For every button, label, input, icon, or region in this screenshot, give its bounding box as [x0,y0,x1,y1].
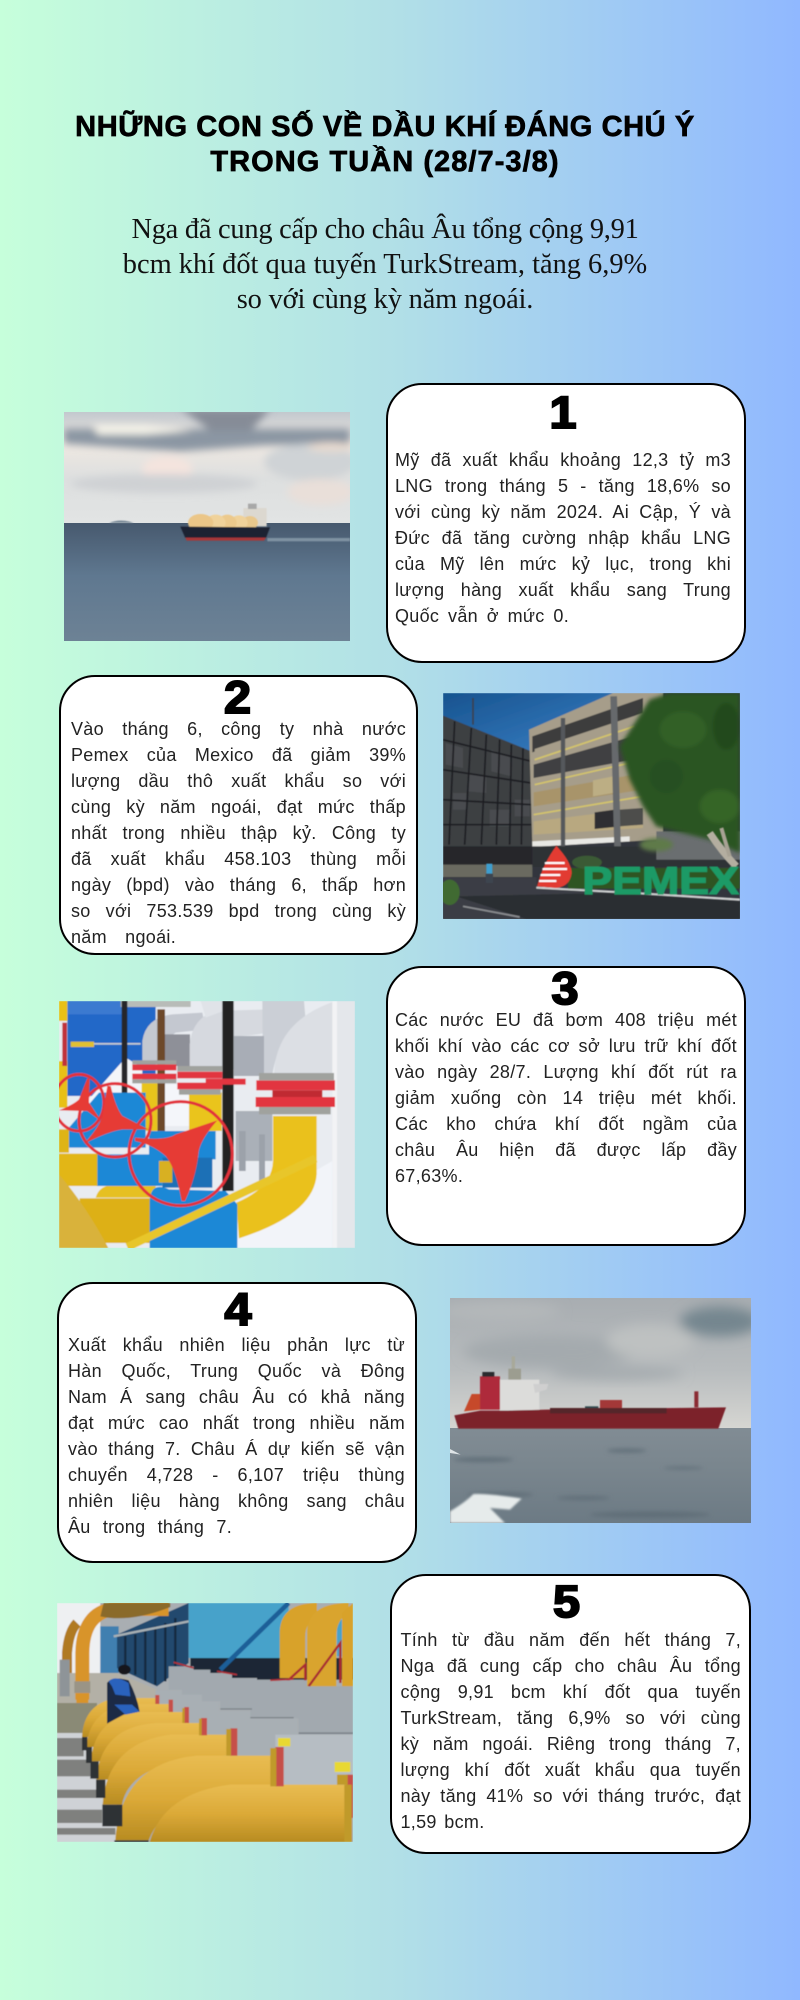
text: fact 4: vào tháng 7. Châu Á dự kiến sẽ vận [68,1439,405,1459]
subtitle: Nga đã cung cấp cho châu Âu tổng cộng 9,91 [131,214,639,245]
number 2: 2 [224,672,251,723]
text: fact 2: Pemex của Mexico đã giảm 39% [71,745,406,765]
snow [87,1058,142,1134]
text: fact 4: Xuất khẩu nhiên liệu phản lực từ [68,1335,405,1355]
wave foam [450,1494,522,1523]
text: fact 2: so với 753.539 bpd trong cùng kỳ [71,901,406,921]
title [75,110,695,178]
number 4: 4 [224,1284,252,1335]
text: fact 5: lượng khí đốt xuất khẩu qua tuyến [400,1760,741,1780]
title: TRONG TUẦN (28/7-3/8) [210,146,560,178]
text: fact 1: của Mỹ lên mức kỷ lục, trong khi [395,554,731,574]
text: fact 3 [395,1010,737,1186]
number 5: 5 [553,1576,580,1627]
text: fact 1: LNG trong tháng 5 - tăng 18,6% so [395,476,731,496]
far valves [60,1660,70,1696]
text: fact 3: vào ngày 28/7. Lượng khí đốt rút ra [395,1062,737,1082]
pipe stubs [82,1737,149,1842]
text: fact 1: Đức đã tăng cường nhập khẩu LNG [395,528,731,548]
subtitle [122,214,647,315]
text: fact 4: Hàn Quốc, Trung Quốc và Đông [68,1361,405,1381]
text: fact 5: kỳ năm ngoái. Riêng trong tháng 7, [400,1734,741,1754]
text: fact 3: 67,63%. [395,1166,463,1186]
red handwheels [54,1074,232,1206]
number 3: 3 [551,963,579,1014]
valve labels [278,1738,290,1746]
worker [107,1679,140,1724]
text: fact 2: ngày (bpd) vào tháng 6, thấp hơn [71,875,406,895]
subtitle: so với cùng kỳ năm ngoái. [237,284,533,315]
text: fact 5: cộng 9,91 bcm khí đốt qua tuyến [400,1682,741,1702]
text: fact 4: đạt mức cao nhất trong nhiều năm [68,1413,405,1433]
ground [443,877,740,919]
upper pipes [67,1623,77,1673]
ground [57,1673,157,1733]
text: fact 2: năm ngoái. [71,927,176,947]
glass building [443,716,531,846]
text: fact 1 [395,450,731,626]
text: fact 2 [71,719,406,947]
text: fact 3: châu Âu hiện đã được lấp đầy [395,1140,737,1160]
ship superstructure [512,1356,515,1380]
text: fact 5: Tính từ đầu năm đến hết tháng 7, [400,1630,741,1650]
text: fact 4: Âu trong tháng 7. [68,1517,232,1537]
text: fact 2: đã xuất khẩu 458.103 thùng mỗi [71,849,406,869]
panel: fact 3 [386,966,746,1246]
text: fact 3: giảm xuống còn 14 triệu mét khối. [395,1088,737,1108]
text: fact 1: Quốc vẫn ở mức 0. [395,606,569,626]
subtitle: bcm khí đốt qua tuyến TurkStream, tăng 6,9% [123,249,647,280]
yellow risers [142,1081,157,1131]
image: red tanker at sea [450,1298,751,1523]
lower yellow pipes [59,1129,69,1153]
image: LNG tanker at sea [64,412,350,641]
text: fact 2: nhất trong nhiều thập kỷ. Công ty [71,823,406,843]
flanges [155,1695,353,1818]
text: fact 4: nhiên liệu hàng không sang châu [68,1491,405,1511]
text: fact 2: cùng kỳ năm ngoái, đạt mức thấp [71,797,406,817]
text: fact 5 [400,1630,741,1832]
title: NHỮNG CON SỐ VỀ DẦU KHÍ ĐÁNG CHÚ Ý [75,111,695,143]
grey valve bodies [169,1666,353,1733]
image: gas valves and yellow pipes [59,1001,355,1248]
panel: fact 5 [390,1574,751,1854]
text: fact 4: Nam Á sang châu Âu có khả năng [68,1387,405,1407]
image: Pemex headquarters [443,693,740,919]
panel: fact 4 [57,1282,417,1563]
elbow pipes [82,1698,352,1842]
text: fact 3: Các kho chứa khí đốt ngầm của [395,1114,737,1134]
text: fact 1: với cùng kỳ năm 2024. Ai Cập, Ý và [395,502,731,522]
text: fact 2: Vào tháng 6, công ty nhà nước [71,719,406,739]
number 1: 1 [549,387,577,438]
text: fact 5: TurkStream, tăng 6,9% so với cùng [400,1708,741,1728]
text: fact 4: chuyển 4,728 - 6,107 triệu thùng [68,1465,405,1485]
logo flame [537,846,572,888]
text: fact 5: này tăng 41% so với tháng trước, đạt [400,1786,741,1806]
text: fact 1: Mỹ đã xuất khẩu khoảng 12,3 tỷ m3 [395,450,731,470]
text: fact 5: Nga đã cung cấp cho châu Âu tổng [400,1656,741,1676]
text: fact 3: Các nước EU đã bơm 408 triệu mét [395,1010,737,1030]
wall [67,1001,156,1096]
text: fact 2: lượng dầu thô xuất khẩu so với [71,771,406,791]
blue canopy and lattice [100,1626,119,1673]
ship hull [454,1407,726,1429]
blue valves [69,1093,237,1248]
tree [620,693,740,853]
grey pipes [142,1013,206,1061]
poles [122,1001,127,1104]
beige building [529,693,663,846]
text: fact 3: khối khí vào các cơ sở lưu trữ khí đốt [395,1036,737,1056]
text: fact 5: 1,59 bcm. [400,1812,484,1832]
text: fact 4 [68,1335,405,1537]
red flanges [132,1064,335,1107]
PEMEX letters: PEMEX [582,859,739,903]
panel: fact 2 [59,675,418,955]
panel: fact 1 [386,383,746,663]
image: yellow gas pipeline valves with worker [57,1603,353,1842]
diagonal yellow pipe [127,1158,316,1247]
text: fact 1: lượng hàng xuất khẩu sang Trung [395,580,731,600]
